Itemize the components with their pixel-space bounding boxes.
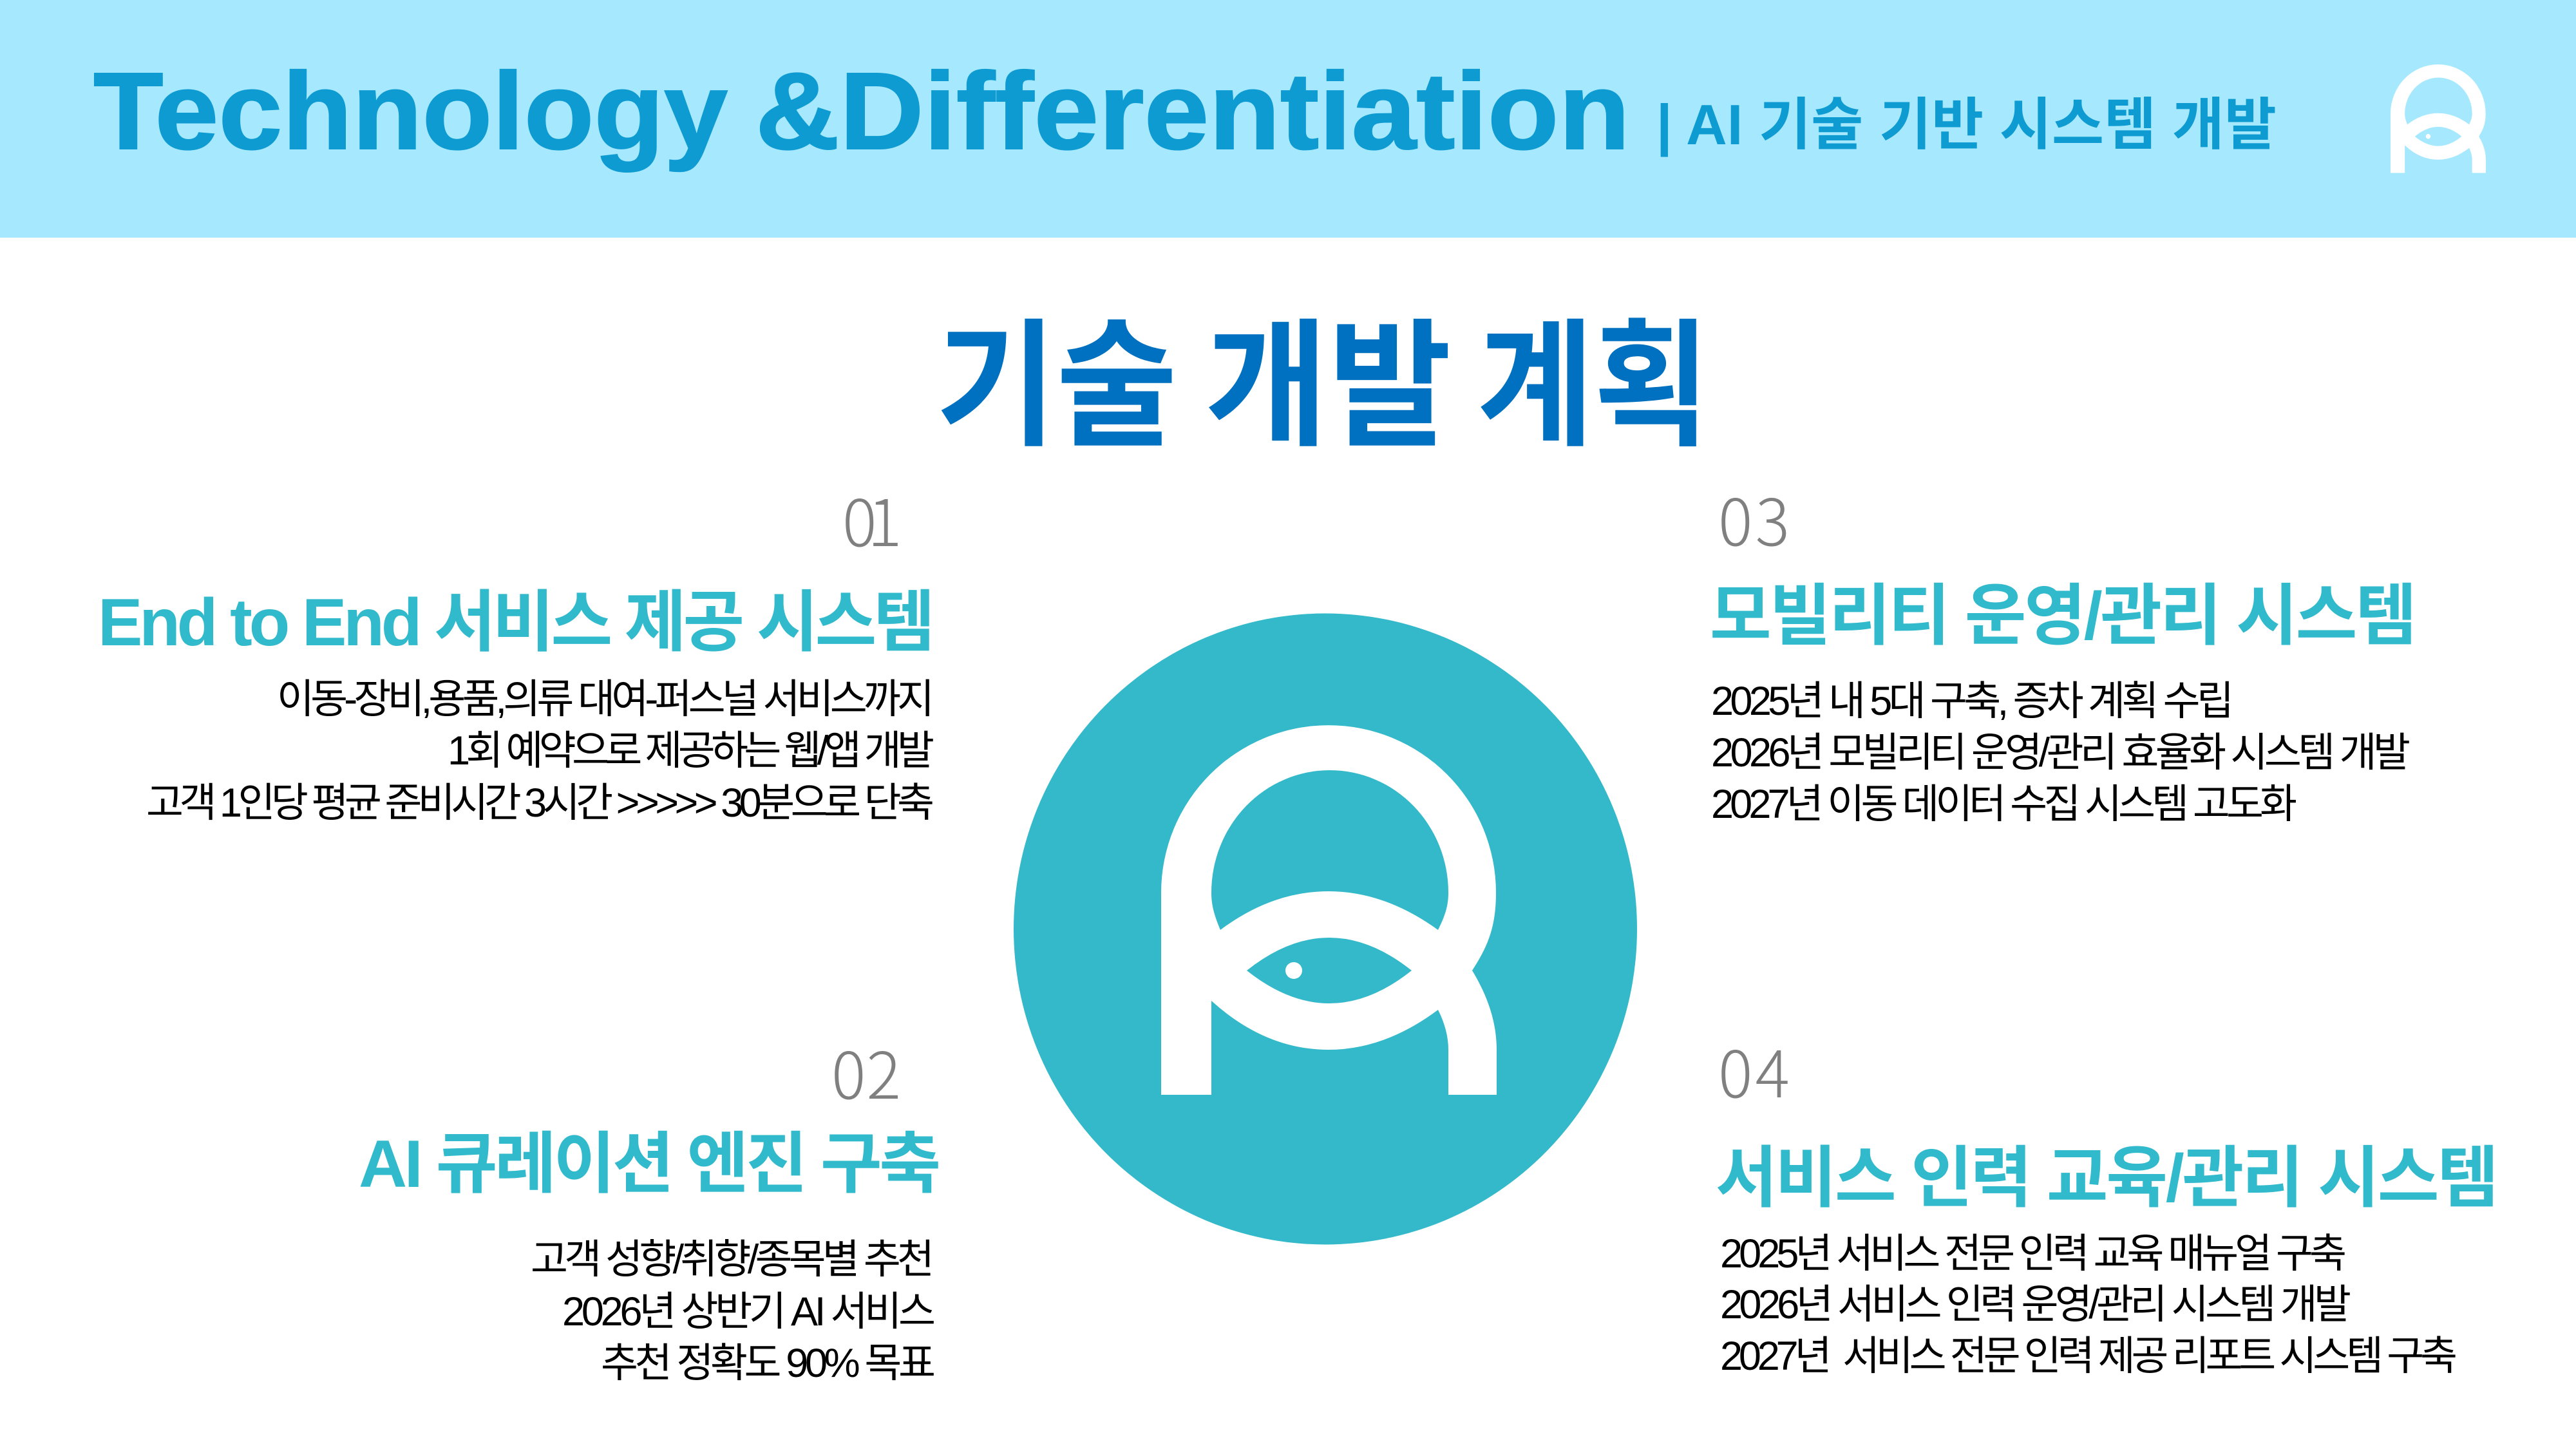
main heading: 계획 <box>1477 310 1710 464</box>
text block 04: 2026년 서비스 인력 운영/관리 시스템 개발 <box>1720 1282 2351 1327</box>
text block 04: 2025년 서비스 전문 인력 교육 매뉴얼 구축 <box>1720 1231 2347 1276</box>
icon: small brand logo <box>2391 64 2486 173</box>
main heading: 기술 <box>936 310 1177 464</box>
header band <box>0 0 2576 238</box>
panel: 02 AI curation engine <box>359 1024 941 1386</box>
panel: 01 end to end service <box>98 471 935 826</box>
heading 03: 모빌리티 운영/관리 시스템 <box>1710 579 2417 654</box>
text block 02 <box>531 1237 936 1386</box>
icon: brand logo with fish eye <box>1161 725 1497 1095</box>
heading 02: AI 큐레이션 엔진 구축 <box>359 1127 941 1202</box>
header title <box>93 50 1630 173</box>
text block 03 <box>1711 679 2410 827</box>
text block 04 <box>1720 1231 2458 1379</box>
header title: Technology <box>93 50 728 173</box>
header subtitle: | AI 기술 기반 시스템 개발 <box>1656 93 2277 157</box>
text block 01: 1회 예약으로 제공하는 웹/앱 개발 <box>448 728 934 773</box>
circle badge <box>1014 613 1637 1244</box>
number 02: 02 <box>831 1024 901 1117</box>
panel: 03 mobility operation <box>1710 471 2417 827</box>
panel: 04 service staff training <box>1716 1023 2499 1379</box>
heading 01: End to End 서비스 제공 시스템 <box>98 585 935 660</box>
text block 04: 2027년 서비스 전문 인력 제공 리포트 시스템 구축 <box>1720 1334 2458 1379</box>
number 04: 04 <box>1718 1023 1790 1116</box>
text block 03: 2026년 모빌리티 운영/관리 효율화 시스템 개발 <box>1711 730 2410 775</box>
text block 02: 2026년 상반기 AI 서비스 <box>562 1289 936 1334</box>
text block 02: 추천 정확도 90% 목표 <box>601 1341 936 1386</box>
number 03: 03 <box>1718 471 1790 564</box>
main heading <box>936 310 1710 464</box>
text block 01: 고객 1인당 평균 준비시간 3시간 >>>>> 30분으로 단축 <box>146 781 934 826</box>
text block 03: 2027년 이동 데이터 수집 시스템 고도화 <box>1711 782 2297 827</box>
heading 04: 서비스 인력 교육/관리 시스템 <box>1716 1141 2499 1216</box>
text block 03: 2025년 내 5대 구축, 증차 계획 수립 <box>1711 679 2234 724</box>
header title: &Differentiation <box>755 50 1630 173</box>
text block 02: 고객 성향/취향/종목별 추천 <box>531 1237 934 1282</box>
number 01: 01 <box>842 471 902 565</box>
main heading: 개발 <box>1205 310 1452 464</box>
panel: center logo <box>1014 613 1637 1244</box>
text block 01 <box>146 677 934 826</box>
text block 01: 이동-장비,용품,의류 대여-퍼스널 서비스까지 <box>277 677 934 722</box>
